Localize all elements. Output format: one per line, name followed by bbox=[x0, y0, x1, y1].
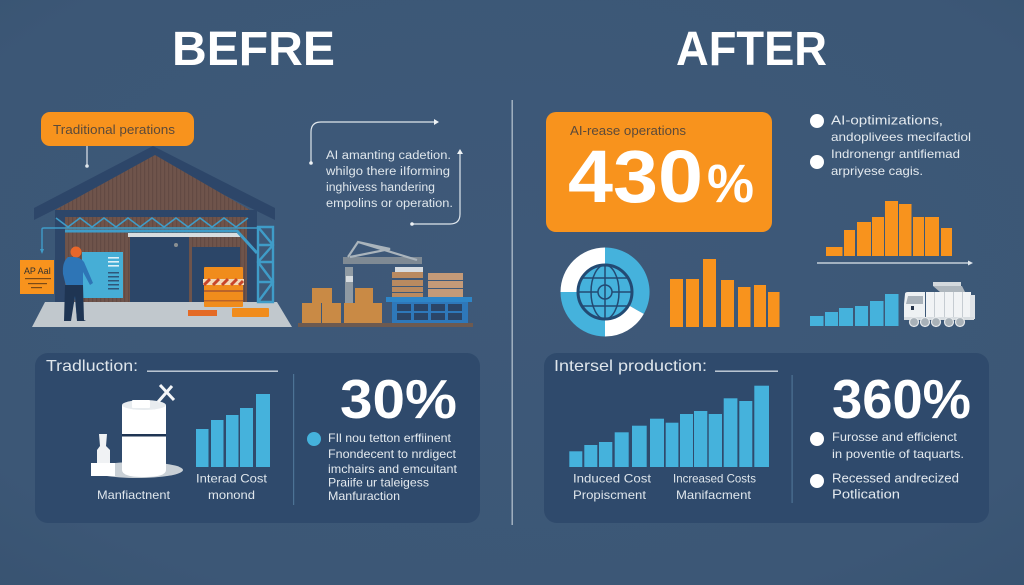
panel: AI production bbox=[544, 353, 989, 523]
bullet text bbox=[810, 430, 964, 502]
worker bbox=[63, 246, 93, 321]
floor bbox=[32, 302, 292, 327]
callout: 430%: 430 bbox=[568, 135, 703, 218]
arrow: label to warehouse bbox=[85, 146, 89, 168]
bullet text: Manfuraction bbox=[328, 489, 400, 503]
bullets: AI optimizations: AI-optimizations, bbox=[831, 114, 943, 128]
icon: manufacturing cylinder bbox=[91, 385, 183, 478]
sign: AP AaI: AP AaI bbox=[24, 266, 51, 277]
labels: Increased Costs bbox=[673, 472, 756, 486]
arrow: top bracket bbox=[309, 119, 439, 165]
chart: donut with globe bbox=[560, 247, 650, 337]
panel: traditional production bbox=[35, 353, 480, 523]
bullet text: Potlication bbox=[832, 486, 900, 502]
labels: Induced Cost bbox=[573, 472, 652, 486]
text: before description: inghivess handering bbox=[326, 182, 435, 194]
text: before description bbox=[325, 150, 453, 210]
arrow: right bracket bbox=[410, 149, 463, 226]
arrow: chart axis bbox=[817, 260, 973, 266]
machine cabinet bbox=[82, 252, 123, 298]
bar chart: blue small bbox=[810, 294, 898, 326]
bullet text: Recessed andrecized bbox=[832, 470, 959, 486]
bullets: AI optimizations: arpriyese cagis. bbox=[831, 164, 923, 178]
callout: 430%: % bbox=[707, 154, 754, 214]
boxes bbox=[302, 288, 382, 323]
heading: Tradluction: bbox=[46, 358, 138, 375]
bullets: AI optimizations: Indronengr antifiemad bbox=[831, 147, 960, 161]
labels: Propiscment bbox=[573, 488, 647, 502]
bullet text: Fnondecent to nrdigect bbox=[328, 447, 457, 461]
bullet text bbox=[307, 431, 458, 503]
bar chart: orange lower bbox=[670, 259, 780, 327]
title: after: AFTER bbox=[676, 23, 827, 76]
roof bbox=[34, 146, 275, 220]
illustration: warehouse bbox=[32, 146, 292, 327]
stacked goods bbox=[392, 272, 423, 297]
labels: monond bbox=[208, 488, 255, 502]
callout: 430% bbox=[546, 112, 772, 232]
walls and doors bbox=[65, 217, 247, 302]
text: before description: AI amanting cadetion. bbox=[326, 150, 451, 162]
icon: globe bbox=[578, 265, 632, 319]
bullet text: Praiife ur taleigess bbox=[328, 476, 429, 490]
text: before description: empolins or operation. bbox=[326, 198, 453, 210]
stat: 30%: 30% bbox=[340, 368, 457, 430]
text: before description: whilgo there iIforming bbox=[325, 166, 450, 178]
icon: truck bbox=[904, 282, 975, 326]
bar chart: orange upper bbox=[826, 201, 952, 256]
stat: 360%: 360% bbox=[832, 368, 971, 430]
labels: Interad Cost bbox=[196, 472, 268, 486]
bullet text: Furosse and efficienct bbox=[832, 430, 958, 444]
bullet text: FIl nou tetton erffiinent bbox=[328, 431, 452, 445]
title: before: BEFRE bbox=[172, 23, 335, 76]
callout: 430%: AI-rease operations bbox=[570, 124, 686, 138]
bullet text: imchairs and emcuitant bbox=[328, 462, 458, 476]
bullets: AI optimizations bbox=[810, 114, 971, 178]
labels: Manifacment bbox=[676, 488, 752, 502]
crane bbox=[345, 267, 353, 304]
blue pallet bbox=[386, 297, 472, 302]
orange pallet stack bbox=[204, 267, 243, 307]
labels bbox=[97, 472, 268, 502]
bullets: AI optimizations: andoplivees mecifactiol bbox=[831, 130, 971, 144]
label: traditional operations: Traditional perations bbox=[53, 123, 175, 137]
label: traditional operations bbox=[41, 112, 194, 146]
blue truss bbox=[42, 218, 273, 302]
labels: Manfiactnent bbox=[97, 488, 171, 502]
bullet text: in poventie of taquarts. bbox=[832, 447, 964, 461]
labels bbox=[573, 472, 756, 502]
heading: Intersel production: bbox=[554, 358, 707, 375]
illustration: crane and cargo bbox=[298, 242, 473, 327]
bar chart: blue rising bbox=[569, 386, 769, 467]
sign: AP AaI bbox=[20, 260, 54, 294]
bar chart: blue bbox=[196, 394, 270, 467]
